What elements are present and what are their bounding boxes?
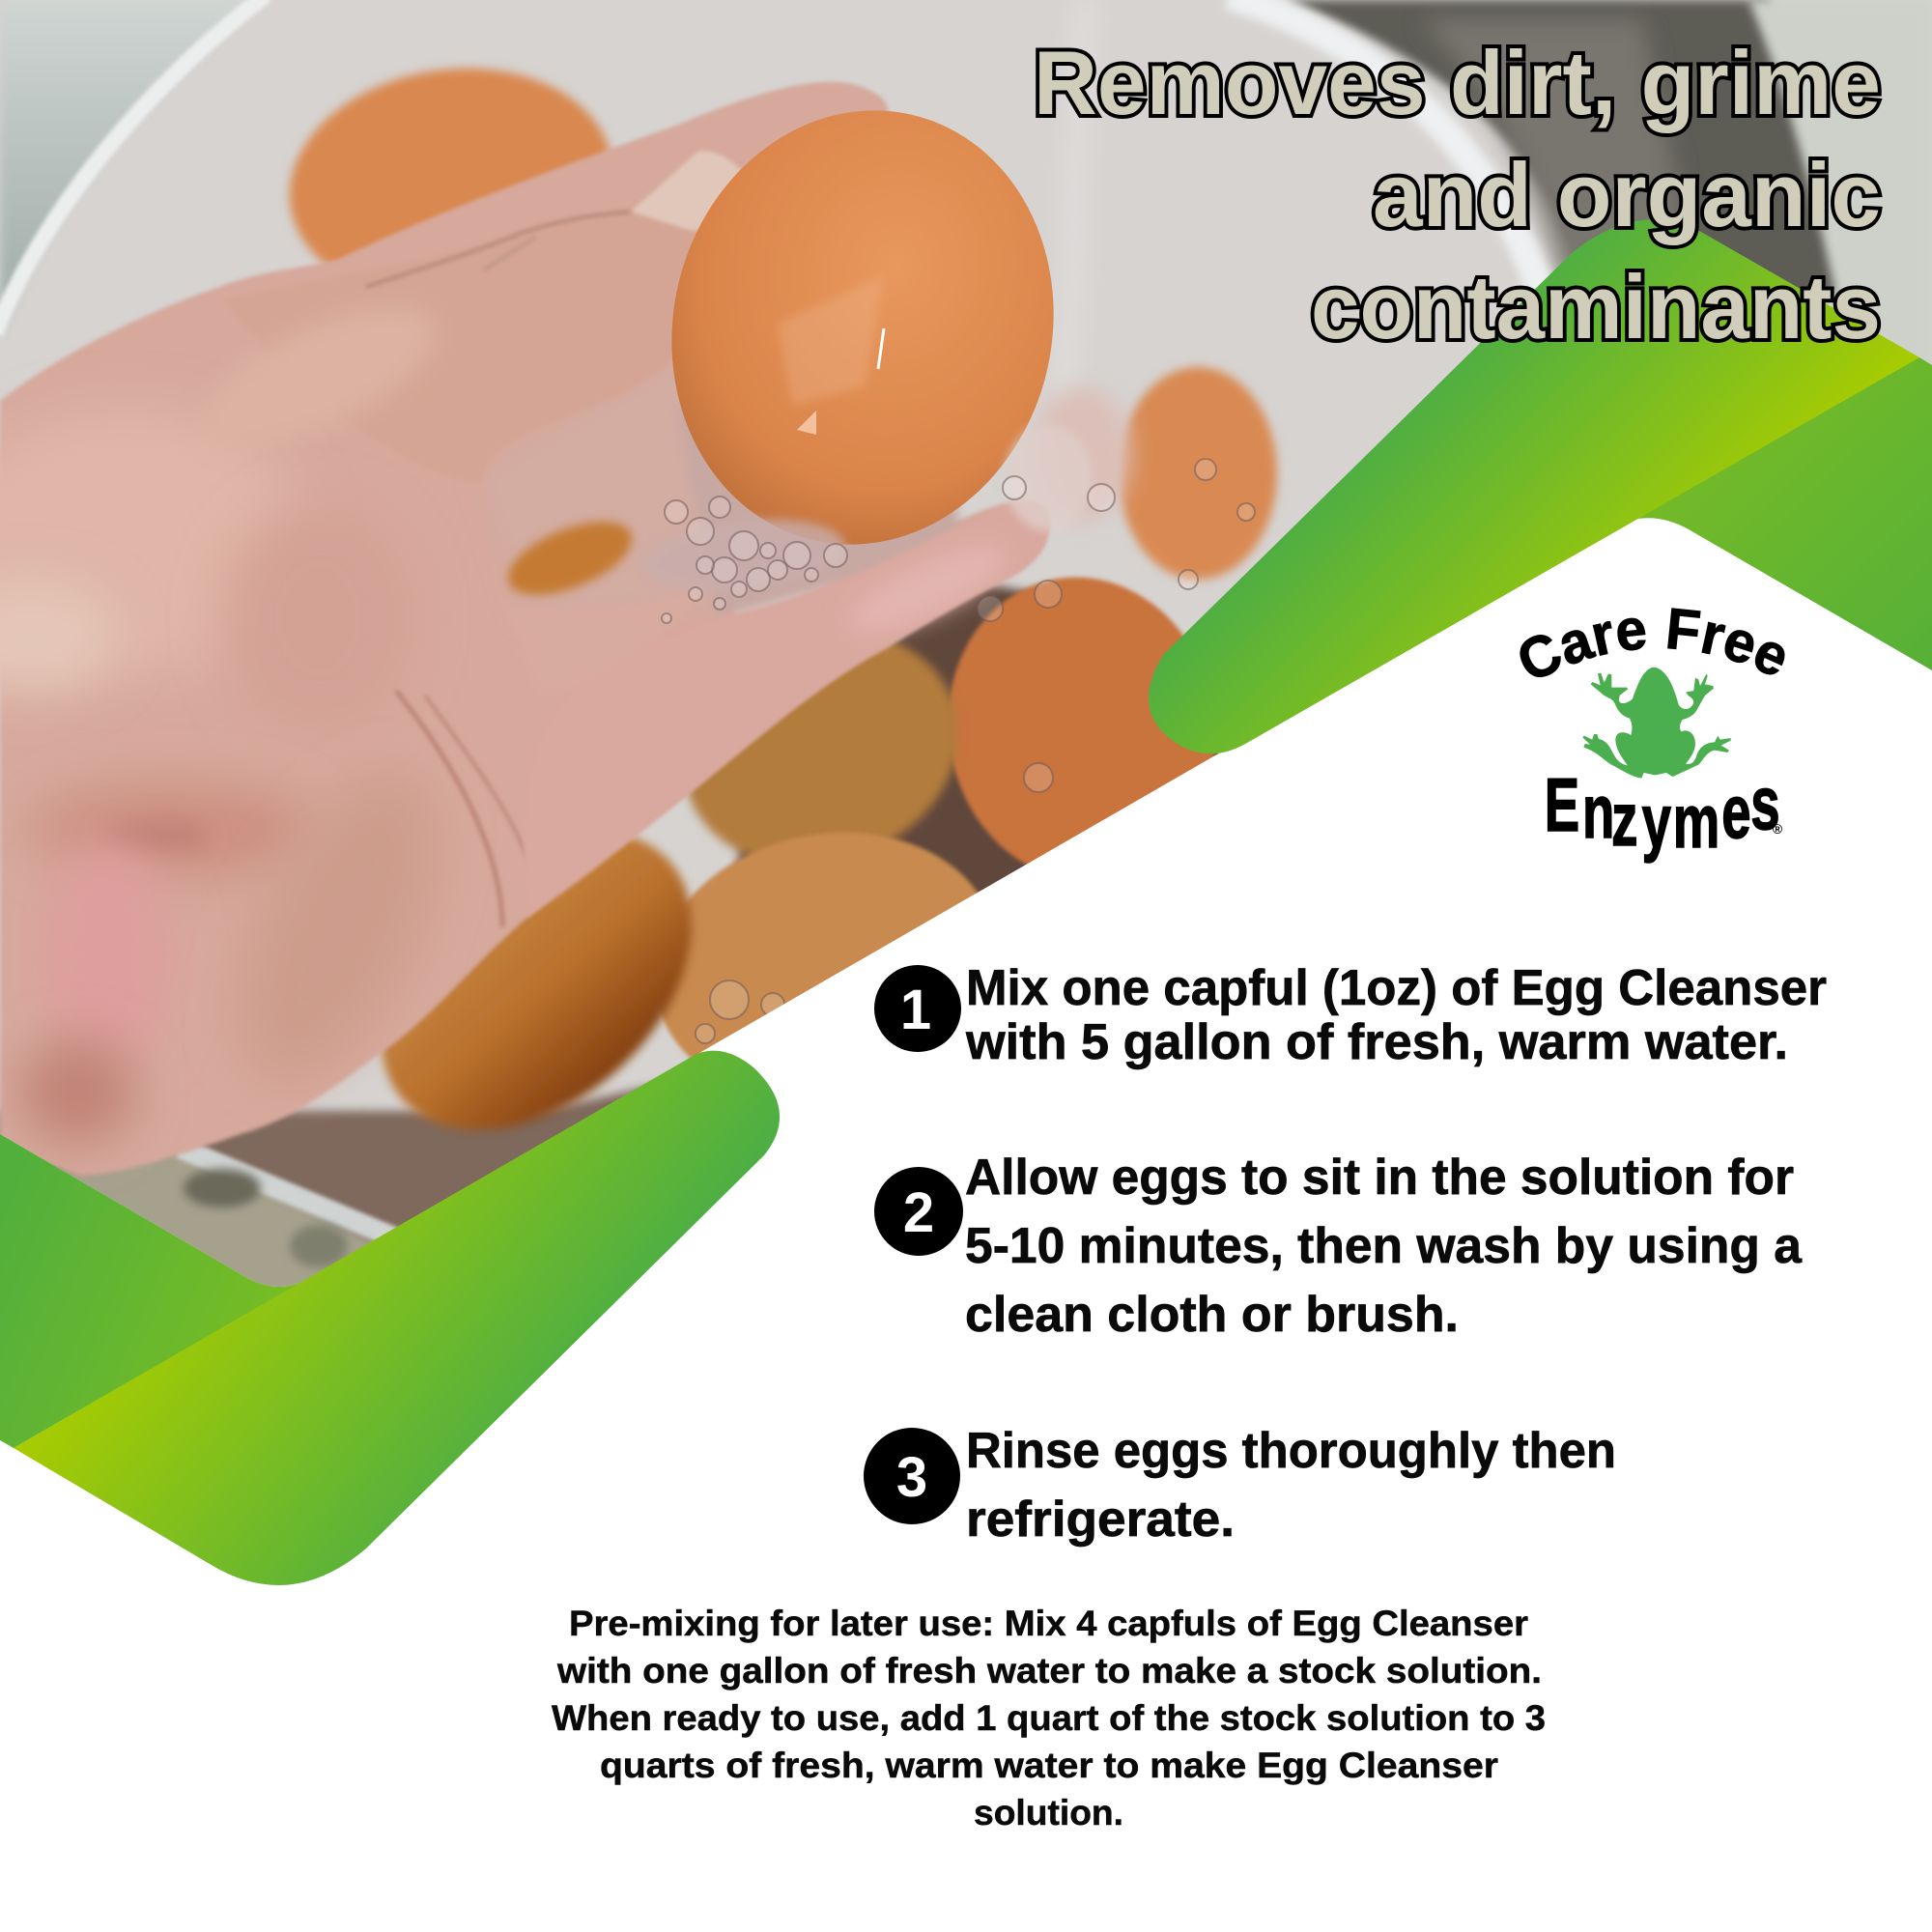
- title: Removes dirt, grime: [1034, 32, 1881, 133]
- step 2 text: [965, 1150, 1803, 1343]
- green band: bottom left, front: [14, 1051, 780, 1585]
- number badge 3: 3: [896, 1446, 927, 1509]
- back egg, right: [1119, 367, 1277, 580]
- green band: top right, front: [1149, 219, 1919, 753]
- title: [1034, 32, 1881, 357]
- thumbnail: [631, 151, 756, 231]
- number badge 1: 1: [900, 979, 931, 1041]
- step 3 text: Rinse eggs thoroughly then: [966, 1423, 1616, 1479]
- step 1 text: [965, 960, 1827, 1070]
- pre-mixing note: Pre-mixing for later use: Mix 4 capfuls of Egg Cleanser: [569, 1604, 1528, 1643]
- pre-mixing note: When ready to use, add 1 quart of the stock solution to 3: [552, 1698, 1546, 1738]
- number badge 1: [874, 965, 961, 1052]
- egg in water, right: [924, 555, 1239, 903]
- number badge 2: [874, 1167, 963, 1256]
- soap bubbles: [639, 425, 1255, 1043]
- step 2: [874, 1150, 1803, 1343]
- number badge 2: 2: [903, 1181, 934, 1244]
- title: and organic: [1373, 144, 1881, 245]
- egg in water, lower left: [323, 771, 750, 1190]
- egg in water, bottom: [631, 802, 1021, 1130]
- number badge 3: [864, 1428, 960, 1524]
- step 2 text: Allow eggs to sit in the solution for: [965, 1150, 1794, 1206]
- pre-mixing note: quarts of fresh, warm water to make Egg Cleanser: [600, 1746, 1498, 1785]
- palm below the gap: [502, 591, 705, 696]
- pre-mixing note: [552, 1604, 1546, 1833]
- photo: hand washing eggs in a bowl: [0, 0, 1932, 1352]
- step 3 text: [966, 1423, 1616, 1548]
- hand: [0, 82, 1049, 1176]
- icon: frog: [1582, 668, 1731, 779]
- green band: bottom left, rear: [0, 1134, 483, 1448]
- thumb: [222, 151, 758, 483]
- step 1: [874, 960, 1827, 1070]
- logo text: Care Free: Care Free: [1520, 608, 1785, 678]
- main egg held in hand: [629, 72, 1096, 582]
- green band: top right, rear: [1546, 357, 1932, 696]
- step 2 text: 5-10 minutes, then wash by using a: [965, 1218, 1803, 1274]
- step 1 text: Mix one capful (1oz) of Egg Cleanser: [966, 960, 1827, 1016]
- logo: Care Free Enzymes: [1520, 608, 1785, 864]
- finger resting below the egg: [524, 504, 1049, 918]
- step 3: [864, 1423, 1616, 1548]
- step 2 text: clean cloth or brush.: [965, 1287, 1459, 1343]
- title: contaminants: [1311, 256, 1881, 357]
- pre-mixing note: with one gallon of fresh water to make a stock solution.: [556, 1651, 1542, 1690]
- white content panel: [0, 518, 1932, 1932]
- egg in water, middle: [650, 594, 992, 903]
- step 3 text: refrigerate.: [966, 1492, 1235, 1548]
- step 1 text: with 5 gallon of fresh, warm water.: [965, 1014, 1788, 1070]
- logo text: Enzymes: Enzymes: [1545, 761, 1780, 864]
- pre-mixing note: solution.: [974, 1793, 1123, 1833]
- back egg, top: [274, 48, 628, 319]
- gap between thumb and fingers: [478, 338, 763, 618]
- registered mark: ®: [1773, 821, 1783, 837]
